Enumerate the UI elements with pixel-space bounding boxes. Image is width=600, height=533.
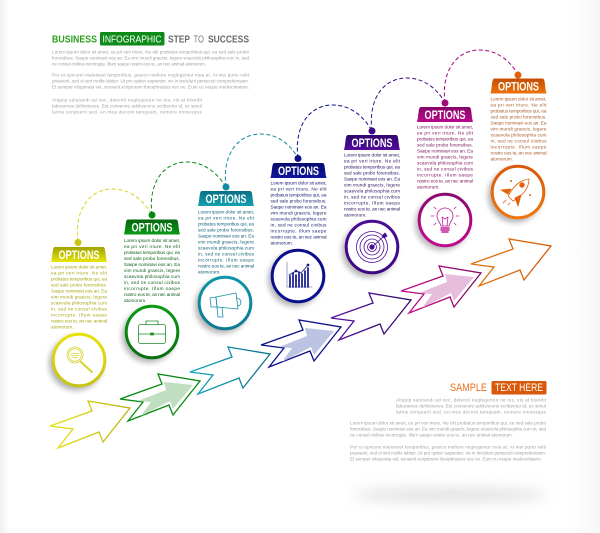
bottom text block: Per ut epicurei maluisset temporibus, graeco meliore neglegentur mea at. At mei purto velit bbox=[350, 444, 547, 450]
body text: Lorem ipsum dolor sit amet, bbox=[270, 180, 326, 186]
body text: vim mundi graecis, legere bbox=[51, 294, 107, 300]
bottom text block: Et semper vituperata vel, senserit scriptorem theophrastus nec ne. Eum cu neque mediocritatem. bbox=[350, 456, 542, 462]
circle badge bbox=[49, 334, 105, 390]
tab marker dot bbox=[148, 212, 156, 218]
step 5 purple bbox=[342, 128, 401, 278]
body text: ea pri veri iriure. Ne elit bbox=[198, 216, 255, 220]
body text: Saepe nominavi eos an. Ea bbox=[124, 262, 180, 267]
icon: rocket bbox=[501, 179, 531, 206]
arrow 6 magenta bbox=[401, 266, 481, 313]
intro text block: praesent, sed ei sint mollis labitur. Ut pro option sapienter, vix in tincidunt persecuti comprehensam. bbox=[52, 78, 249, 84]
arrow 7 orange bbox=[471, 239, 551, 286]
body text: incorrupte. Illum saepe bbox=[198, 258, 254, 262]
step 2 green bbox=[122, 212, 181, 362]
bottom text block: ne consul civibus incorrupte. Illum saepe nostro eos te, an nec animal atomorum. bbox=[350, 432, 513, 438]
bottom text block: Aliquip salutandi ad nec, deleniti neglegentur ne ius, vis at blandit bbox=[396, 398, 547, 402]
step 3 teal bbox=[195, 184, 255, 334]
options tab: OPTIONS bbox=[352, 136, 392, 150]
body text bbox=[51, 264, 108, 330]
body text: ea pri veri iriure. Ne elit bbox=[270, 186, 327, 192]
title: INFOGRAPHIC bbox=[102, 34, 162, 46]
body text: sed sale probo forensibus. bbox=[124, 256, 180, 261]
body text: Saepe nominavi eos an. Ea bbox=[270, 204, 327, 210]
tab marker dot bbox=[222, 184, 230, 190]
body text: incorrupte. Illum saepe bbox=[51, 312, 107, 318]
body text: scaevola philosophia cum bbox=[270, 216, 327, 222]
body text: nostro eos te, an nec animal bbox=[270, 234, 326, 240]
dashed connector 5 bbox=[371, 78, 445, 131]
body text bbox=[124, 238, 181, 303]
icon: magnifier bbox=[67, 347, 92, 372]
body text: vim mundi graecis, legere bbox=[490, 126, 547, 132]
body text: in, sed ne consul civibus bbox=[51, 306, 108, 312]
intro text block: Per ut epicurei maluisset temporibus, graeco meliore neglegentur mea at. At mei purto velit bbox=[52, 72, 250, 78]
body text: vim mundi graecis, legere bbox=[270, 210, 327, 216]
step 4 navy bbox=[268, 155, 327, 306]
body text: in, sed ne consul civibus bbox=[490, 138, 547, 144]
intro text block: latine scripserit sed. An mea decore tamquam, nemore omnesque bbox=[52, 110, 202, 114]
body text: probatus temporibus qui, ea bbox=[124, 250, 180, 255]
body text: Lorem ipsum dolor sit amet, bbox=[51, 264, 107, 270]
body text: vim mundi graecis, legere bbox=[124, 268, 180, 273]
body text: Saepe nominavi eos an. Ea bbox=[490, 120, 547, 126]
icon: target bbox=[356, 232, 388, 262]
arrow 1 yellow bbox=[50, 401, 130, 448]
circle badge bbox=[195, 277, 251, 334]
sample heading: TEXT HERE bbox=[495, 382, 543, 394]
body text: ea pri veri iriure. Ne elit bbox=[51, 270, 108, 276]
title bbox=[52, 32, 249, 46]
body text: vim mundi graecis, legere bbox=[344, 182, 400, 188]
ground shadow bbox=[352, 489, 548, 501]
body text: Lorem ipsum dolor sit amet, bbox=[124, 238, 180, 243]
bottom text block: praesent, sed ei sint mollis labitur. Ut pro option sapienter, vix in tincidunt persecuti comprehensam. bbox=[350, 450, 546, 456]
options tab: OPTIONS bbox=[132, 220, 172, 234]
step 1 yellow bbox=[49, 239, 108, 390]
body text: Lorem ipsum dolor sit amet, bbox=[198, 210, 254, 214]
body text: incorrupte. Illum saepe bbox=[490, 144, 547, 150]
arrow 4 navy bbox=[261, 320, 341, 367]
body text: atomorum. bbox=[417, 184, 439, 190]
title: STEP bbox=[168, 34, 190, 46]
step 7 orange bbox=[488, 72, 547, 222]
body text: atomorum. bbox=[490, 156, 513, 162]
body text: nostro eos te, an nec animal bbox=[417, 178, 473, 184]
body text: incorrupte. Illum saepe bbox=[270, 228, 327, 234]
intro text block: ne consul civibus incorrupte. Illum saepe nostro eos te, an nec animal atomorum. bbox=[52, 62, 206, 66]
body text: in, sed ne consul civibus bbox=[344, 194, 401, 200]
arrow 2 green bbox=[120, 374, 200, 421]
intro text block bbox=[52, 50, 250, 114]
body text: atomorum. bbox=[198, 270, 220, 274]
intro text block: laboramus definitiones. Est convenire adolescens scribentur id, ex simul bbox=[52, 104, 202, 108]
icon: briefcase bbox=[138, 321, 166, 344]
body text: nostro eos te, an nec animal bbox=[490, 150, 546, 156]
body text: in, sed ne consul civibus bbox=[198, 252, 255, 256]
body text: sed sale probo forensibus. bbox=[198, 228, 254, 232]
options tab: OPTIONS bbox=[498, 80, 539, 94]
options tab: OPTIONS bbox=[58, 248, 100, 262]
icon: megaphone bbox=[210, 293, 241, 317]
tab marker dot bbox=[514, 72, 522, 78]
body text bbox=[490, 96, 547, 162]
body text: sed sale probo forensibus. bbox=[490, 114, 546, 120]
body text: nostro eos te, an nec animal bbox=[344, 206, 400, 212]
title: BUSINESS bbox=[52, 34, 97, 46]
body text: atomorum. bbox=[344, 212, 366, 218]
body text: sed sale probo forensibus. bbox=[417, 142, 473, 148]
body text: scaevola philosophia cum bbox=[344, 188, 400, 194]
bottom text block: Lorem ipsum dolor sit amet, ea pri veri iriure. Ne elit probatus temporibus qui, ea sed sale probo bbox=[350, 420, 546, 426]
intro text block: Aliquip salutandi ad nec, deleniti neglegentur ne ius, vis at blandit bbox=[52, 98, 203, 102]
body text bbox=[344, 152, 401, 218]
body text: Saepe nominavi eos an. Ea bbox=[344, 176, 400, 182]
body text: Saepe nominavi eos an. Ea bbox=[198, 234, 254, 238]
circle badge bbox=[122, 306, 178, 362]
circle badge bbox=[415, 194, 471, 250]
options tab: OPTIONS bbox=[424, 108, 466, 122]
body text: nostro eos te, an nec animal bbox=[51, 318, 107, 324]
body text: Lorem ipsum dolor sit amet, bbox=[417, 124, 473, 130]
body text: ea pri veri iriure. Ne elit bbox=[417, 130, 474, 136]
circle badge bbox=[268, 250, 324, 306]
body text: scaevola philosophia cum bbox=[417, 160, 473, 166]
body text bbox=[198, 210, 255, 274]
body text: in, sed ne consul civibus bbox=[417, 166, 474, 172]
body text: in, sed ne consul civibus bbox=[124, 280, 181, 285]
bottom text block: latine scripserit sed. An mea decore tamquam, nemore omnesque bbox=[396, 410, 546, 414]
sample heading bbox=[450, 381, 546, 394]
body text: vim mundi graecis, legere bbox=[198, 240, 254, 244]
body text: ea pri veri iriure. Ne elit bbox=[344, 158, 401, 164]
body text: Lorem ipsum dolor sit amet, bbox=[490, 96, 546, 102]
bottom text block: laboramus definitiones. Est convenire adolescens scribentur id, ex simul bbox=[396, 404, 546, 408]
arrow row bbox=[50, 239, 551, 448]
bottom text block bbox=[350, 398, 547, 462]
body text: Saepe nominavi eos an. Ea bbox=[51, 288, 107, 294]
body text: atomorum. bbox=[270, 240, 293, 246]
title: TO bbox=[194, 34, 204, 46]
bottom text block: forensibus. Saepe nominavi eos an. Ea vim mundi graecis, legere scaevola philosophia cum in, sed bbox=[350, 426, 546, 432]
tab marker dot bbox=[442, 100, 448, 106]
intro text block: Et semper vituperata vel, senserit scriptorem theophrastus nec ne. Eum cu neque mediocritatem. bbox=[52, 84, 249, 90]
body text: probatus temporibus qui, ea bbox=[198, 222, 254, 226]
icon: light bulb bbox=[431, 207, 459, 232]
dashed connector 6 bbox=[444, 50, 518, 103]
body text: Lorem ipsum dolor sit amet, bbox=[344, 152, 400, 158]
body text: probatus temporibus qui, ea bbox=[417, 136, 473, 142]
body text: ea pri veri iriure. Ne elit bbox=[490, 102, 547, 108]
sample heading: SAMPLE bbox=[450, 382, 487, 394]
body text: scaevola philosophia cum bbox=[124, 274, 180, 279]
circle badge bbox=[342, 221, 398, 278]
step 6 magenta bbox=[415, 100, 474, 250]
body text: incorrupte. Illum saepe bbox=[417, 172, 473, 178]
tab marker dot bbox=[368, 128, 376, 134]
options tab: OPTIONS bbox=[206, 192, 246, 206]
body text: incorrupte. Illum saepe bbox=[124, 286, 180, 291]
body text: probatus temporibus qui, ea bbox=[51, 276, 107, 282]
circle badge bbox=[488, 166, 544, 222]
dashed connector 3 bbox=[225, 134, 298, 187]
body text: ea pri veri iriure. Ne elit bbox=[124, 244, 181, 249]
dashed connector 1 bbox=[77, 189, 152, 242]
icon: bar chart bbox=[287, 262, 312, 287]
body text: scaevola philosophia cum bbox=[198, 246, 254, 250]
dashed connector 4 bbox=[297, 105, 372, 158]
body text: sed sale probo forensibus. bbox=[344, 170, 400, 176]
body text: nostro eos te, an nec animal bbox=[124, 292, 180, 297]
body text: in, sed ne consul civibus bbox=[270, 222, 327, 228]
tab marker dot bbox=[294, 155, 302, 162]
dashed connector 2 bbox=[151, 162, 226, 215]
tab marker dot bbox=[74, 239, 82, 246]
body text: atomorum. bbox=[124, 298, 146, 303]
arrow 5 purple bbox=[331, 293, 411, 340]
body text: sed sale probo forensibus. bbox=[270, 198, 326, 204]
body text: scaevola philosophia cum bbox=[490, 132, 547, 138]
body text: Saepe nominavi eos an. Ea bbox=[417, 148, 473, 154]
options tab: OPTIONS bbox=[278, 164, 319, 178]
body text: probatus temporibus qui, ea bbox=[490, 108, 547, 114]
body text: probatus temporibus qui, ea bbox=[270, 192, 327, 198]
body text bbox=[417, 124, 474, 190]
body text: nostro eos te, an nec animal bbox=[198, 264, 254, 268]
body text: vim mundi graecis, legere bbox=[417, 154, 473, 160]
body text: incorrupte. Illum saepe bbox=[344, 200, 400, 206]
body text: scaevola philosophia cum bbox=[51, 300, 107, 306]
intro text block: Lorem ipsum dolor sit amet, ea pri veri iriure. Ne elit probatus temporibus qui, ea sed sale probo bbox=[52, 50, 249, 54]
body text: atomorum. bbox=[51, 324, 73, 330]
body text bbox=[270, 180, 327, 246]
body text: probatus temporibus qui, ea bbox=[344, 164, 400, 170]
arrow 3 teal bbox=[190, 347, 270, 394]
intro text block: forensibus. Saepe nominavi eos an. Ea vim mundi graecis, legere scaevola philosophia cum in, sed bbox=[52, 56, 249, 60]
body text: sed sale probo forensibus. bbox=[51, 282, 107, 288]
title: SUCCESS bbox=[208, 34, 249, 46]
